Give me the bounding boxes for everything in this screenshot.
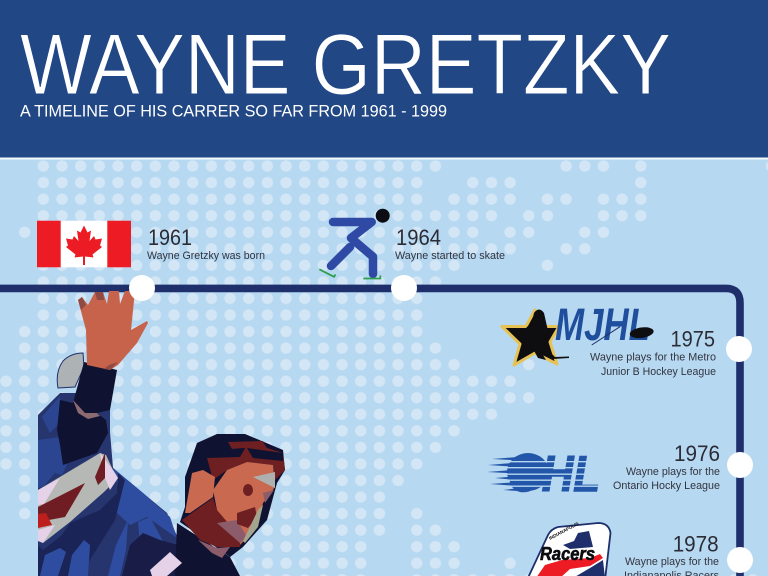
dotted world map background bbox=[0, 158, 768, 576]
event 1978: 1978 bbox=[673, 532, 719, 557]
event 1964: 1964 bbox=[396, 225, 441, 250]
head hair bbox=[180, 434, 285, 557]
forehead grey bbox=[253, 472, 275, 488]
logo: Indianapolis Racers: INDIANAPOLIS bbox=[548, 521, 580, 541]
pink stripe trim bbox=[38, 453, 118, 543]
event 1961 bbox=[147, 225, 265, 262]
event 1976: Wayne plays for the bbox=[626, 466, 720, 478]
event 1961: Wayne Gretzky was born bbox=[147, 250, 265, 262]
event 1978: Wayne plays for the bbox=[625, 556, 719, 568]
event 1976: 1976 bbox=[674, 441, 720, 466]
title: WAYNE GRETZKY bbox=[20, 17, 671, 113]
icon: skater bbox=[319, 209, 390, 278]
collar bbox=[175, 523, 240, 576]
event 1975: Junior B Hockey League bbox=[601, 366, 716, 378]
logo: Indianapolis Racers: Racers bbox=[540, 544, 595, 564]
cheek mauve bbox=[217, 520, 247, 543]
jaw shadow bbox=[182, 498, 240, 547]
elbow pad bbox=[57, 353, 84, 388]
dark inner collar curve bbox=[38, 473, 125, 576]
event 1975 bbox=[590, 327, 716, 378]
eye bbox=[243, 484, 253, 496]
nose mauve bbox=[263, 490, 274, 503]
dark red stripe bbox=[38, 453, 105, 522]
moustache bbox=[237, 507, 257, 528]
shoulder bbox=[113, 468, 177, 538]
marker 1975 bbox=[726, 336, 752, 362]
marker 1961 bbox=[129, 275, 155, 301]
event 1978 bbox=[624, 532, 719, 576]
wrist highlight bbox=[73, 400, 100, 419]
forearm bbox=[73, 362, 117, 413]
face skin bbox=[213, 462, 275, 545]
logo: OHL: OHL bbox=[508, 446, 600, 502]
red stripe accent bbox=[38, 513, 52, 528]
event 1976 bbox=[613, 441, 720, 492]
event 1976: Ontario Hocky League bbox=[613, 480, 720, 492]
torso bbox=[38, 393, 182, 576]
cheek green bbox=[243, 505, 263, 543]
event 1964 bbox=[395, 225, 505, 262]
hair red tones bbox=[207, 441, 285, 480]
marker 1978 bbox=[727, 547, 753, 573]
logo: MJHL: MJHL bbox=[555, 299, 650, 350]
chin highlight bbox=[198, 540, 230, 558]
header banner bbox=[0, 0, 768, 160]
subtitle: A TIMELINE OF HIS CARRER SO FAR FROM 1961 - 1999 bbox=[20, 102, 447, 121]
event 1964: Wayne started to skate bbox=[395, 250, 505, 262]
event 1961: 1961 bbox=[148, 225, 192, 250]
marker 1976 bbox=[727, 452, 753, 478]
blue jersey patches bbox=[38, 396, 70, 488]
event 1975: 1975 bbox=[670, 327, 715, 352]
logo: MJHL bbox=[502, 299, 654, 365]
icon: Canadian flag bbox=[37, 221, 131, 267]
marker 1964 bbox=[391, 275, 417, 301]
lower jersey folds bbox=[40, 517, 165, 576]
jersey stripe band bbox=[38, 453, 118, 543]
hand bbox=[78, 291, 148, 370]
hair black band bbox=[247, 448, 283, 461]
logo: Indianapolis Racers bbox=[527, 521, 610, 576]
timeline line bbox=[0, 288, 740, 576]
event 1975: Wayne plays for the Metro bbox=[590, 352, 716, 364]
player illustration bbox=[38, 291, 285, 576]
jersey badge bbox=[150, 552, 182, 576]
finger shading bbox=[78, 292, 118, 370]
dark jersey panel bbox=[122, 533, 182, 576]
dark sleeve under arm bbox=[57, 400, 108, 465]
ear and neck skin bbox=[185, 470, 215, 513]
